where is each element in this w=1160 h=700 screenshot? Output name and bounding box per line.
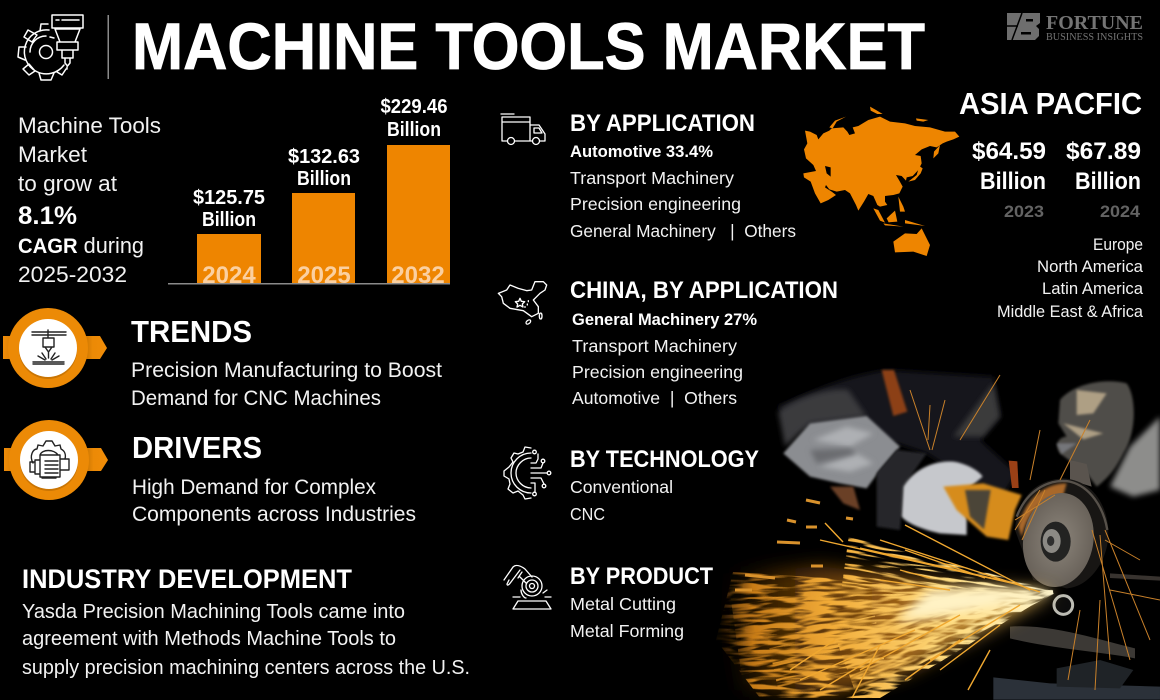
white glove xyxy=(902,461,983,535)
industry development text: agreement with Methods Machine Tools to xyxy=(22,628,396,650)
section: by application: Precision engineering xyxy=(570,194,741,214)
section: by product: Metal Forming xyxy=(570,621,684,641)
icon: gear with CNC spindle xyxy=(18,15,83,80)
dark jacket xyxy=(777,370,1017,500)
CAGR text block: 2025-2032 xyxy=(18,262,127,287)
CAGR text block: to grow at xyxy=(18,171,118,196)
bar 2032: 2032 xyxy=(391,262,445,289)
CAGR text block: 8.1% xyxy=(18,202,77,230)
icon: technology gear circuit xyxy=(504,447,551,499)
stat: Asia Pacific 2024: Billion xyxy=(1075,168,1141,195)
section: China by application xyxy=(570,277,838,408)
stat: Asia Pacific 2023: 2023 xyxy=(1004,202,1044,221)
cuff xyxy=(877,450,927,530)
workbench xyxy=(1010,626,1135,658)
cutting disc xyxy=(1016,487,1101,593)
stat: Asia Pacific 2023 xyxy=(972,138,1046,221)
section: China by application: Automotive | Others xyxy=(572,388,737,408)
drivers text xyxy=(132,476,416,526)
CAGR text block: Market xyxy=(18,142,88,167)
icon: truck xyxy=(501,114,545,144)
CAGR text block xyxy=(18,113,161,287)
title divider xyxy=(108,15,109,79)
section: China by application: Transport Machinery xyxy=(572,336,737,356)
section: by product xyxy=(570,563,713,641)
main spark cone xyxy=(722,566,1053,696)
grinder body xyxy=(943,483,1022,540)
upper glove xyxy=(1057,381,1134,487)
logo: Fortune Business Insights xyxy=(1007,12,1143,43)
list: other regions: Middle East & Africa xyxy=(997,303,1144,321)
drivers text: Components across Industries xyxy=(132,503,416,526)
heading: Asia Pacific: ASIA PACFIC xyxy=(959,86,1142,121)
industry development text xyxy=(22,601,470,679)
icon: drivers badge with motor xyxy=(4,420,108,500)
CAGR text block: CAGR during xyxy=(18,233,144,258)
industry development text: supply precision machining centers across the U.S. xyxy=(22,657,470,679)
handle xyxy=(1070,460,1092,487)
section: by application: BY APPLICATION xyxy=(570,110,755,137)
bar 2024: $125.75 xyxy=(193,187,265,209)
bar 2024: Billion xyxy=(202,209,256,231)
section: by application: Automotive 33.4% xyxy=(570,143,713,161)
icon: cutting tool xyxy=(504,566,551,609)
section: by technology xyxy=(570,446,759,524)
industry development text: Yasda Precision Machining Tools came into xyxy=(22,601,405,623)
bar 2025 xyxy=(288,146,360,289)
section: by technology: CNC xyxy=(570,504,605,524)
CAGR text block: Machine Tools xyxy=(18,113,161,138)
right background highlight xyxy=(1110,417,1160,497)
section: China by application: General Machinery 27% xyxy=(572,311,757,329)
bar 2024 xyxy=(193,187,265,289)
bar 2032: $229.46 xyxy=(380,96,448,118)
logo: Fortune Business Insights: FORTUNE xyxy=(1046,12,1143,34)
bar chart: market size xyxy=(168,96,450,289)
bar 2032 xyxy=(380,96,450,289)
stat: Asia Pacific 2024: $67.89 xyxy=(1066,138,1141,165)
strap accent xyxy=(882,370,907,416)
section: by application: General Machinery | Others xyxy=(570,221,796,241)
photo: worker using angle grinder with sparks xyxy=(716,370,1160,700)
section: by application: Transport Machinery xyxy=(570,168,734,188)
bar 2025: Billion xyxy=(297,168,351,190)
section: by product: BY PRODUCT xyxy=(570,563,713,590)
stat: Asia Pacific 2024: 2024 xyxy=(1100,202,1141,221)
section: by technology: BY TECHNOLOGY xyxy=(570,446,759,473)
guard xyxy=(1015,478,1108,588)
trends heading: TRENDS xyxy=(131,314,252,349)
trends text: Demand for CNC Machines xyxy=(131,387,381,410)
map: Asia Pacific xyxy=(803,107,959,256)
section: by product: Metal Cutting xyxy=(570,594,676,614)
list: other regions xyxy=(997,236,1144,321)
drivers text: High Demand for Complex xyxy=(132,476,376,499)
bar 2025: 2025 xyxy=(297,262,351,289)
bar 2025: $132.63 xyxy=(288,146,360,168)
stat: Asia Pacific 2024 xyxy=(1066,138,1141,221)
bar 2032: Billion xyxy=(387,119,441,141)
icon: trends badge with laser cutter xyxy=(3,308,107,388)
stat: Asia Pacific 2023: Billion xyxy=(980,168,1046,195)
section: by application xyxy=(570,110,796,241)
section: China by application: CHINA, BY APPLICATION xyxy=(570,277,838,304)
stat: Asia Pacific 2023: $64.59 xyxy=(972,138,1046,165)
industry development heading: INDUSTRY DEVELOPMENT xyxy=(22,564,352,594)
Australia xyxy=(893,228,930,256)
trends text: Precision Manufacturing to Boost xyxy=(131,359,442,382)
section: by technology: Conventional xyxy=(570,477,673,497)
list: other regions: Latin America xyxy=(1042,280,1144,298)
title: MACHINE TOOLS MARKET xyxy=(132,9,925,83)
trends text xyxy=(131,359,442,410)
icon: China map xyxy=(498,282,547,325)
logo: Fortune Business Insights: BUSINESS INSIGHTS xyxy=(1046,32,1143,43)
list: other regions: North America xyxy=(1037,258,1144,276)
spark streaks xyxy=(790,523,1040,698)
list: other regions: Europe xyxy=(1093,236,1143,254)
drivers heading: DRIVERS xyxy=(132,430,262,465)
cut tube xyxy=(1054,596,1073,614)
lit sleeve xyxy=(783,416,900,488)
section: China by application: Precision engineering xyxy=(572,362,743,382)
bar 2024: 2024 xyxy=(202,262,256,289)
